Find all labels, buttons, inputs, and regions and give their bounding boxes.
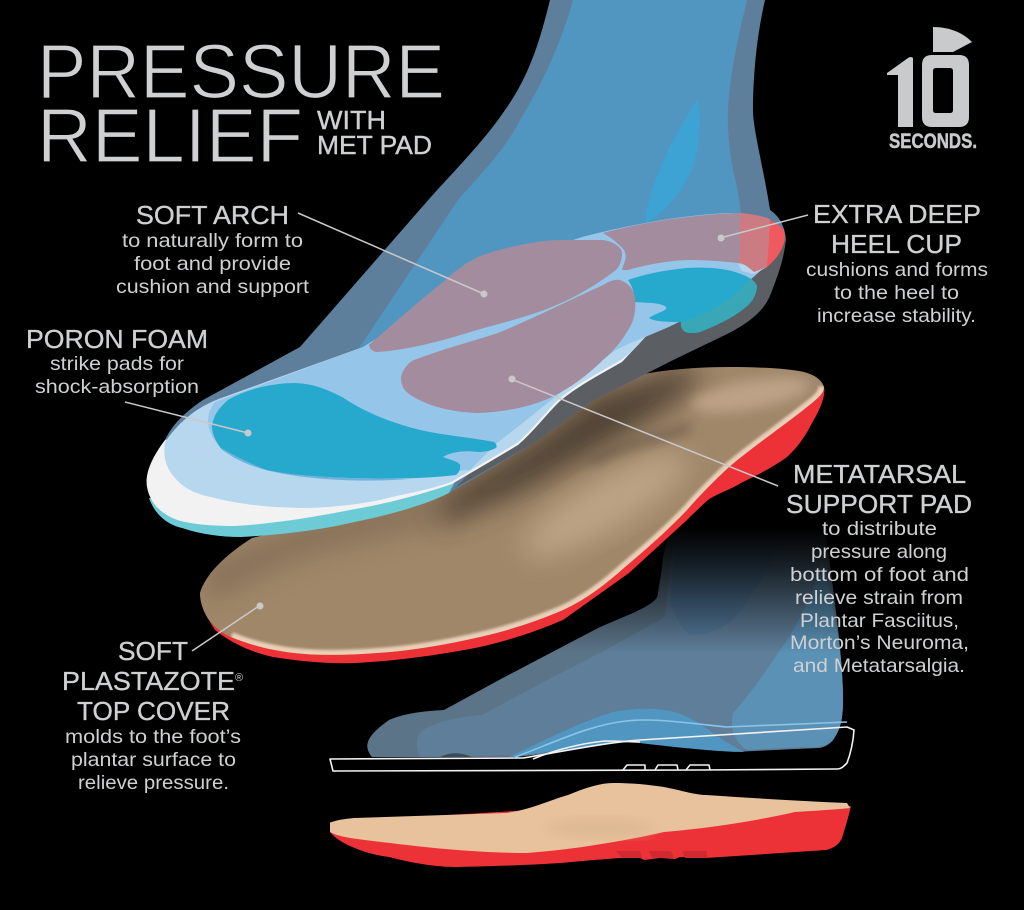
title: [37, 29, 445, 179]
forefoot poron teal pad: [212, 383, 497, 479]
heel pink pad: [603, 213, 742, 270]
teal rim: [149, 480, 456, 537]
mid blue layer: [208, 213, 784, 478]
label: soft plastazote top cover: TOP COVER: [77, 696, 230, 726]
upper foot translucent body: [165, 0, 786, 492]
leader lines and dots: [125, 213, 808, 651]
label: soft arch: [116, 200, 310, 298]
label: metatarsal support pad: pressure along: [811, 541, 947, 563]
label: metatarsal support pad: [786, 459, 972, 677]
side view sole outline: [330, 720, 854, 771]
logo: 10 seconds: [887, 27, 977, 153]
label: metatarsal support pad: Morton’s Neuroma,: [790, 632, 969, 654]
lower foot side view: [367, 528, 860, 765]
label: soft plastazote top cover: PLASTAZOTE: [62, 666, 235, 696]
heel metatarsal teal pad: [628, 268, 757, 333]
label: extra deep heel cup: to the heel to: [834, 282, 959, 304]
label: soft plastazote top cover: ®: [235, 672, 243, 684]
title: PRESSURE: [37, 29, 445, 115]
heel blended tone: [738, 213, 770, 272]
title: RELIEF: [37, 93, 303, 179]
bottom insole side photo: [330, 783, 851, 867]
label: poron foam: shock-absorption: [35, 376, 199, 398]
label: extra deep heel cup: cushions and forms: [806, 259, 988, 281]
label: metatarsal support pad: and Metatarsalgia.: [793, 655, 965, 677]
label: soft arch: to naturally form to: [122, 230, 303, 252]
white base: [147, 332, 650, 526]
label: soft plastazote top cover: molds to the foot’s: [65, 726, 241, 748]
fade to black: [530, 528, 860, 653]
logo: 10 seconds: SECONDS.: [889, 130, 977, 153]
label: metatarsal support pad: bottom of foot and: [790, 564, 969, 586]
title: WITH: [317, 105, 386, 135]
label: soft plastazote top cover: SOFT: [118, 636, 188, 666]
label: poron foam: PORON FOAM: [26, 324, 208, 354]
label: metatarsal support pad: to distribute: [822, 518, 937, 540]
title: MET PAD: [317, 130, 432, 160]
label: soft arch: SOFT ARCH: [136, 200, 289, 230]
tan plastazote insole: [200, 365, 824, 663]
label: extra deep heel cup: [806, 199, 988, 327]
label: poron foam: [26, 324, 208, 398]
label: extra deep heel cup: HEEL CUP: [831, 229, 962, 259]
label: soft plastazote top cover: plantar surface to: [71, 749, 236, 771]
label: extra deep heel cup: increase stability.: [817, 305, 976, 327]
heel red tip: [738, 213, 785, 272]
label: extra deep heel cup: EXTRA DEEP: [813, 199, 981, 229]
label: metatarsal support pad: METATARSAL: [793, 459, 966, 489]
label: poron foam: strike pads for: [50, 353, 185, 375]
cutaway insole: [147, 213, 785, 537]
label: metatarsal support pad: SUPPORT PAD: [786, 489, 972, 519]
label: soft arch: cushion and support: [116, 276, 310, 298]
label: soft plastazote top cover: [62, 636, 243, 794]
metatarsal pink pad: [401, 280, 635, 413]
label: metatarsal support pad: Plantar Fasciitus,: [800, 610, 959, 632]
label: soft plastazote top cover: relieve pressure.: [78, 772, 229, 794]
pale heel strip: [738, 264, 767, 274]
label: metatarsal support pad: relieve strain from: [795, 587, 963, 609]
arch pink pad: [369, 240, 622, 352]
pale blue body: [164, 320, 650, 508]
label: soft arch: foot and provide: [134, 253, 291, 275]
